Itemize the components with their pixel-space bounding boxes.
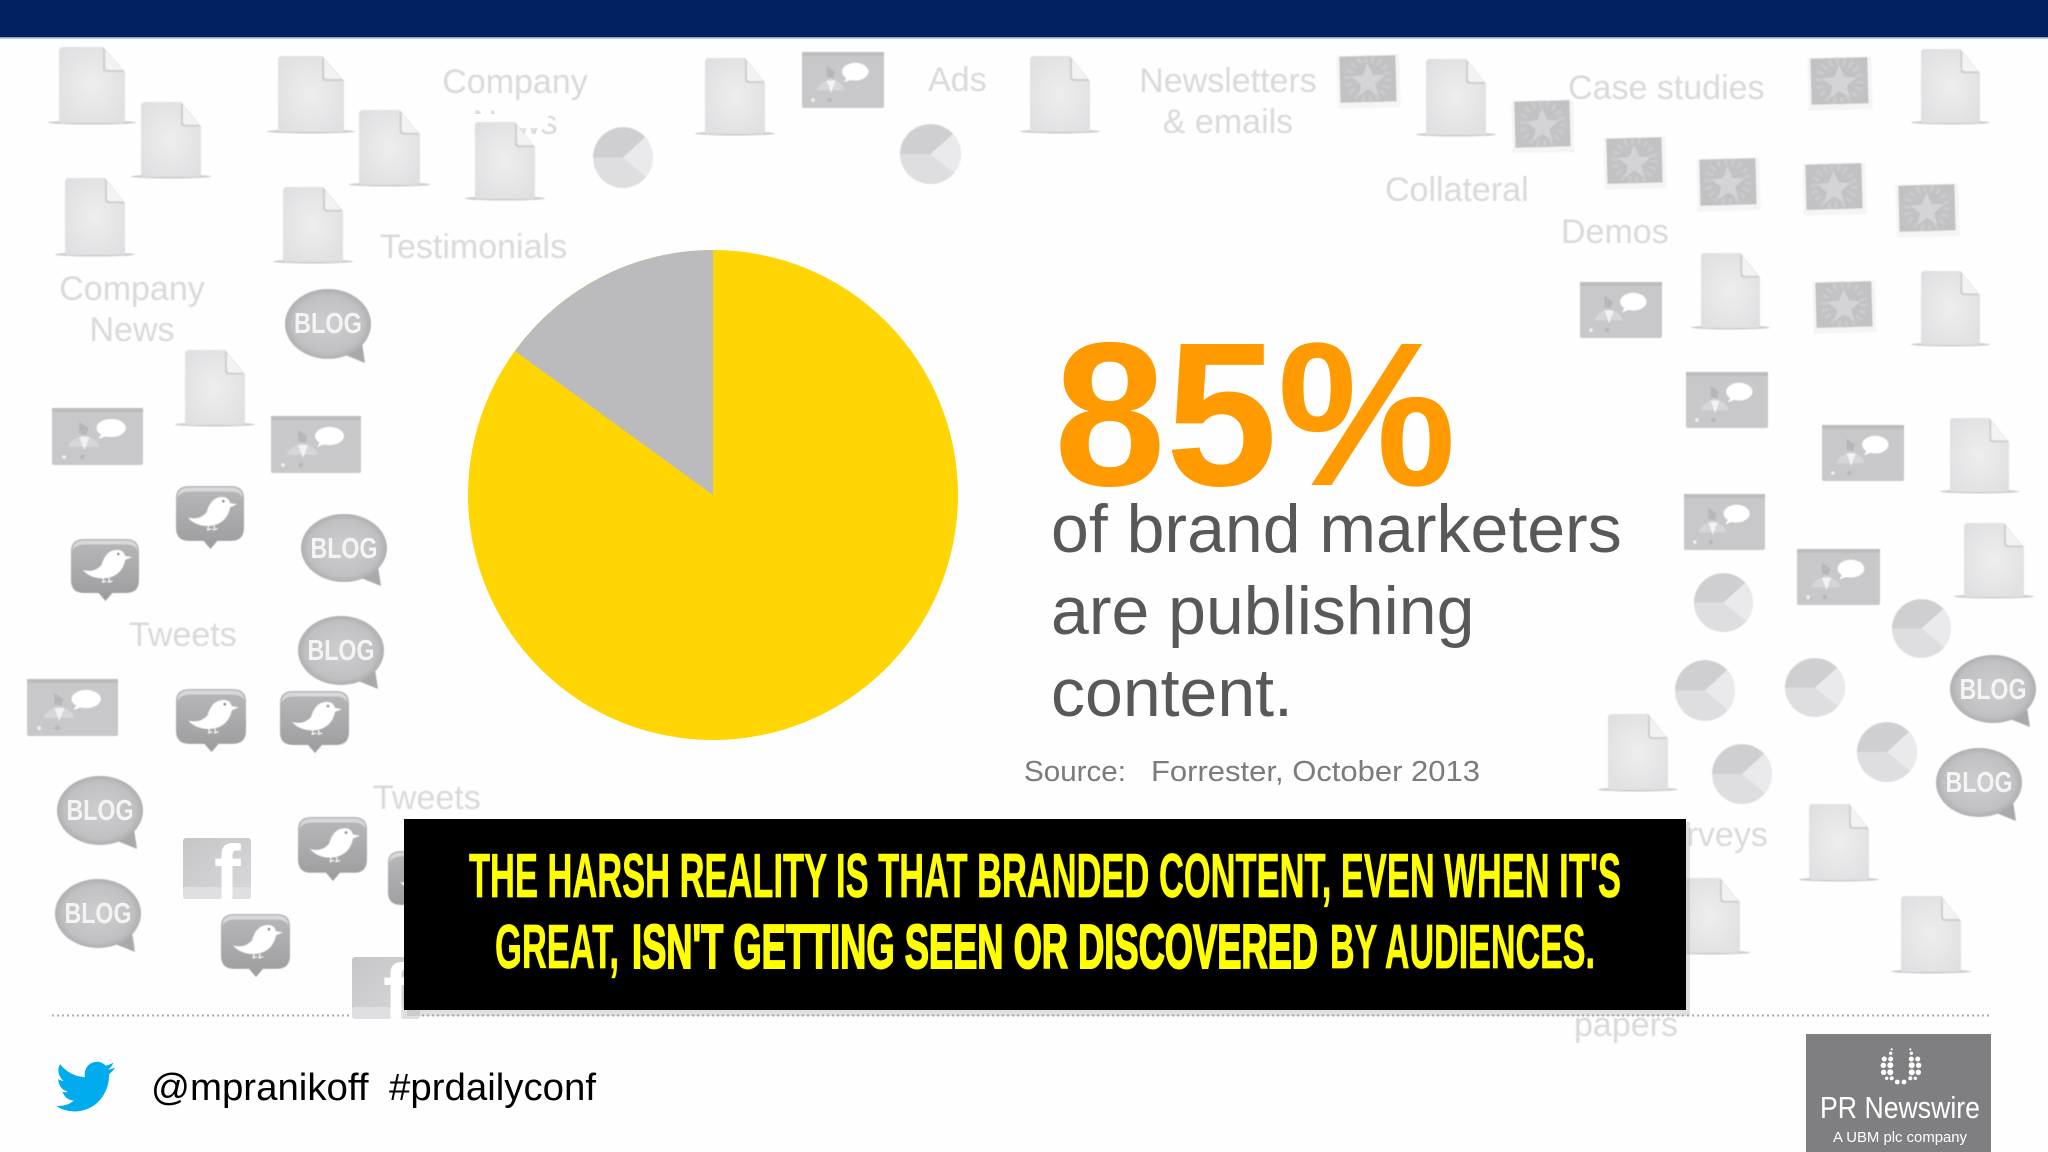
icon: document: [48, 47, 136, 124]
icon: tweet bubble (behind callout): [388, 851, 457, 913]
icon: blog bubble: BLOG: [294, 308, 362, 340]
icon: document: [695, 58, 775, 136]
icon: document: [1416, 59, 1496, 136]
faded background label: Testimonials: Testimonials: [380, 228, 567, 266]
icon: video panel: [27, 679, 118, 736]
icon: document: [1911, 271, 1990, 346]
halo masking the label behind the document: [465, 114, 548, 128]
faded background label: Company News (left): Company: [59, 270, 205, 308]
icon: blog bubble: BLOG: [310, 533, 378, 565]
icon: mini pie: [1712, 744, 1772, 804]
callout: harsh reality: BY AUDIENCES.: [1330, 913, 1595, 982]
icon: blog bubble: [57, 776, 143, 849]
faded background label: Newsletters and emails: & emails: [1163, 103, 1293, 141]
icon: tweet bubble: [176, 486, 244, 549]
icon: star photo: [1336, 54, 1401, 109]
icon: document: [1598, 714, 1678, 792]
faded background label: Collateral: Collateral: [1385, 171, 1529, 209]
stat description: content.: [1051, 655, 1293, 731]
icon: facebook tile: [183, 838, 251, 899]
icon: video panel: [1686, 372, 1768, 428]
faded background label: Tweets (left): Tweets: [129, 616, 237, 654]
icon: tweet bubble: [280, 691, 349, 753]
icon: mini pie: [900, 124, 961, 184]
icon: document: [131, 102, 211, 178]
icon: tweet bubble: [221, 914, 290, 977]
faded background label: Tweets (lower): Tweets: [373, 779, 481, 817]
faded background label: Company News (left): [59, 270, 205, 349]
faded background label: Company News (top): [442, 63, 588, 142]
faded background label: Surveys: Surveys: [1645, 816, 1768, 854]
icon: document: [349, 110, 430, 186]
icon: star photo: [1802, 162, 1867, 216]
icon: mini pie: [1694, 573, 1753, 632]
icon: facebook tile (behind callout): f: [383, 948, 410, 1037]
logo: PR Newswire: PR Newswire: [1820, 1090, 1980, 1125]
icon: document: [175, 350, 255, 426]
icon: document: [273, 187, 353, 263]
icon: mini pie: [593, 127, 653, 188]
source line: Forrester, October 2013: [1151, 756, 1480, 788]
twitter handle and hashtag: #prdailyconf: [389, 1066, 596, 1109]
icon: document: [1940, 418, 2019, 493]
callout: harsh reality: ISN'T GETTING SEEN OR DISCOVERED: [632, 913, 1318, 982]
callout: harsh reality: GREAT,: [495, 913, 619, 982]
logo: PR Newswire: A UBM plc company: [1833, 1129, 1967, 1146]
icon: video panel: [802, 52, 884, 108]
icon: blog bubble: BLOG: [1946, 767, 2012, 799]
twitter handle and hashtag: @mpranikoff: [151, 1066, 369, 1109]
faded background label: papers: papers: [1574, 1006, 1678, 1044]
icon: document: [55, 178, 135, 257]
icon: document: [1891, 896, 1971, 974]
icon: mini pie: [1785, 658, 1845, 717]
icon: video panel: [271, 416, 361, 473]
divider line: [52, 1014, 1991, 1016]
source line: [1024, 756, 1480, 788]
icon: star photo: [1807, 56, 1873, 111]
icon: blog bubble: BLOG: [64, 898, 132, 930]
icon: blog bubble: [285, 289, 371, 363]
stat description: [1051, 491, 1622, 731]
source line: Source:: [1024, 756, 1126, 788]
icon: document: [1670, 878, 1750, 954]
icon: twitter bird: [56, 1062, 115, 1111]
icon: video panel: [1822, 425, 1904, 481]
icon: facebook tile (behind callout): [352, 957, 420, 1019]
twitter handle and hashtag: [151, 1066, 596, 1109]
icon: video panel: [1797, 549, 1880, 605]
icon: star photo: [1895, 183, 1960, 238]
icon: document: [1799, 804, 1879, 882]
icon: blog bubble: BLOG: [1960, 674, 2026, 706]
icon: tweet bubble: [71, 539, 139, 601]
faded background label: Ads: Ads: [928, 61, 987, 99]
icon: document: [1691, 253, 1770, 329]
faded background label: Company News (left): News: [89, 311, 175, 349]
icon: star photo: [1511, 99, 1575, 154]
icon: mini pie: [1857, 722, 1917, 782]
icon: document: [465, 122, 545, 201]
icon: video panel: [1580, 282, 1662, 338]
top navy bar: [0, 0, 2048, 38]
icon: video panel: [1684, 494, 1765, 550]
stat description: of brand marketers: [1051, 491, 1622, 567]
icon: star photo: [1696, 157, 1761, 212]
callout: harsh reality: [404, 819, 1690, 1016]
logo mark: dotted globe: [1881, 1048, 1921, 1084]
logo: PR Newswire: [1806, 1034, 1991, 1152]
icon: document: [1911, 49, 1990, 124]
faded background label: Company News (top): News: [472, 104, 558, 142]
big stat: 85%: 85%: [1054, 300, 1456, 529]
stat description: are publishing: [1051, 573, 1474, 649]
icon: document: [267, 56, 355, 134]
faded background label: Newsletters and emails: Newsletters: [1139, 62, 1317, 100]
icon: mini pie: [1675, 660, 1735, 721]
icon: mini pie: [1892, 599, 1951, 658]
icon: blog bubble: BLOG: [308, 635, 374, 667]
faded background label: Newsletters and emails: [1139, 62, 1317, 141]
icon: blog bubble: [298, 616, 384, 689]
icon: blog bubble: BLOG: [66, 795, 134, 827]
faded background label: Company News (top): Company: [442, 63, 588, 101]
icon: video panel: [52, 408, 143, 465]
icon: blog bubble: [55, 879, 141, 952]
icon: document: [1954, 523, 2034, 598]
icon: facebook tile: f: [214, 829, 241, 918]
icon: star photo: [1812, 280, 1877, 334]
icon: blog bubble: [1950, 655, 2036, 727]
icon: blog bubble: [1936, 748, 2022, 821]
faded background label: Case studies: Case studies: [1568, 69, 1765, 107]
icon: tweet bubble: [298, 817, 367, 881]
icon: document: [1020, 56, 1100, 134]
icon: tweet bubble: [176, 689, 246, 752]
icon: blog bubble: [301, 514, 387, 586]
icon: star photo: [1603, 136, 1667, 190]
pie chart: 85 percent: [468, 250, 958, 740]
faded background label: Demos: Demos: [1561, 213, 1669, 251]
